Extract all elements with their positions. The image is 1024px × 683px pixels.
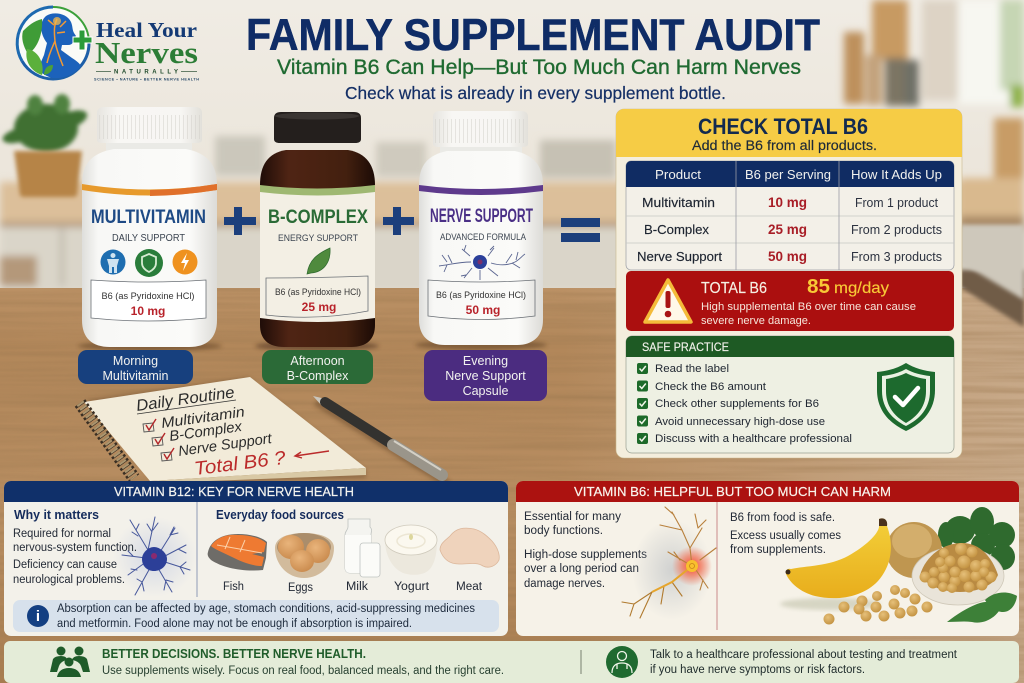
b6 table: How It Adds Up: [851, 168, 942, 182]
footer banner: Use supplements wisely. Focus on real food, balanced meals, and the right care.: [102, 665, 504, 677]
b6 table: 25 mg: [768, 222, 807, 237]
total B6 warning: 85: [807, 276, 830, 298]
time label: evening: [424, 350, 547, 401]
dose box: B6 (as Pyridoxine HCl): [275, 287, 361, 298]
checklist: Discuss with a healthcare professional: [655, 433, 852, 445]
b6 benefits and risks text: over a long period can: [524, 563, 639, 575]
panel header: [616, 109, 962, 157]
absorption note: Absorption can be affected by age, stomach conditions, acid-suppressing medicines: [57, 603, 475, 615]
why it matters: Deficiency can cause: [13, 559, 117, 571]
footer banner: [4, 641, 1019, 683]
icon: leaf: [307, 248, 330, 274]
everyday food sources: Milk: [346, 581, 368, 593]
why it matters: nervous-system function.: [13, 542, 137, 554]
notebook: daily routine: Multivitamin: [160, 404, 246, 432]
product name: MULTIVITAMIN: [91, 207, 206, 228]
time label: evening: Evening: [463, 354, 508, 368]
checklist: [637, 363, 852, 445]
label: [260, 186, 375, 322]
logo wordmark: Heal Your: [96, 18, 197, 42]
spiral binding: [80, 403, 134, 478]
illustration: damaged nerve: [622, 507, 716, 620]
panel header: VITAMIN B12: KEY FOR NERVE HEALTH: [114, 484, 354, 499]
time label: morning: [78, 350, 193, 384]
notebook: daily routine: B-Complex: [168, 419, 244, 445]
spinach: [938, 507, 1015, 570]
potato: [886, 522, 942, 578]
logo: Heal Your Nerves Naturally: Nerves: [95, 35, 198, 70]
loose chickpeas: [824, 585, 932, 624]
product name: NERVE SUPPORT: [430, 206, 533, 227]
plus sign 2: [383, 207, 414, 235]
label stripe: [82, 184, 217, 196]
food shadow: [780, 598, 880, 610]
label stripe: [419, 185, 543, 195]
food: milk: [345, 519, 380, 577]
bottle: multivitamin: DAILY SUPPORT: [112, 233, 185, 244]
panel: vitamin B6: [516, 481, 1019, 636]
food: meat: [440, 528, 499, 567]
panel header: [516, 481, 1019, 502]
food: yogurt: [385, 525, 437, 575]
time label: afternoon: Afternoon: [290, 354, 345, 368]
safe practice: SAFE PRACTICE: [642, 342, 729, 354]
everyday food sources: Everyday food sources: [216, 507, 344, 522]
time label: afternoon: B-Complex: [287, 369, 349, 383]
product name: B-COMPLEX: [268, 207, 368, 228]
tagline: Check what is already in every supplement bottle.: [345, 83, 726, 103]
time label: afternoon: [262, 350, 373, 384]
bowl of chickpeas: [912, 543, 1004, 605]
icon: info: i: [36, 608, 40, 625]
bottle: nerve support: [415, 111, 547, 350]
b6 table: 10 mg: [768, 195, 807, 210]
pen: [313, 396, 448, 484]
logo emblem: [17, 7, 92, 79]
panel header: VITAMIN B6: HELPFUL BUT TOO MUCH CAN HARM: [574, 484, 891, 499]
dose box: 25 mg: [302, 300, 336, 314]
time label: morning: Morning: [113, 354, 158, 368]
absorption note: [13, 600, 499, 632]
b6 benefits and risks text: body functions.: [524, 525, 603, 537]
dose box: B6 (as Pyridoxine HCl): [102, 291, 194, 302]
title: FAMILY SUPPLEMENT AUDIT: [246, 11, 820, 60]
dose box: B6 (as Pyridoxine HCl): [436, 290, 526, 301]
dose box: [91, 280, 206, 321]
absorption note: and metformin. Food alone may not be enough if absorption is impaired.: [57, 618, 412, 630]
total B6 warning: mg/day: [834, 280, 889, 297]
bottle: multivitamin: [78, 107, 222, 351]
panel header: Add the B6 from all products.: [692, 138, 877, 153]
b6 table: From 2 products: [851, 223, 942, 237]
time label: evening: Nerve Support: [445, 369, 526, 383]
footer banner: if you have nerve symptoms or risk factors.: [650, 664, 865, 676]
b6 table: Multivitamin: [642, 196, 715, 210]
benefit icons: [100, 249, 198, 277]
bottle: b-complex: ENERGY SUPPORT: [278, 233, 358, 244]
checklist: Check the B6 amount: [655, 381, 766, 393]
food: eggs: [275, 533, 334, 578]
handwritten list: Daily Routine: [135, 384, 236, 415]
illustration: neuron: [113, 517, 197, 597]
b6 benefits and risks text: damage nerves.: [524, 578, 605, 590]
time label: morning: Multivitamin: [102, 369, 169, 383]
b6 table: 50 mg: [768, 249, 807, 264]
time label: evening: Capsule: [463, 384, 508, 398]
everyday food sources: [208, 507, 499, 594]
b6 food text: Excess usually comes: [730, 530, 841, 542]
notebook: daily routine: [80, 377, 366, 483]
everyday food sources: Meat: [456, 581, 483, 593]
illustration: b6 foods: [780, 507, 1017, 624]
logo: Heal Your Nerves Naturally: NATURALLY: [114, 70, 178, 76]
dose box: [266, 276, 368, 317]
everyday food sources: Eggs: [288, 582, 313, 594]
footer banner: Talk to a healthcare professional about testing and treatment: [650, 649, 958, 661]
footer banner: BETTER DECISIONS. BETTER NERVE HEALTH.: [102, 646, 366, 661]
notebook: daily routine: Total B6 ?: [193, 448, 287, 480]
dose box: 50 mg: [466, 303, 500, 317]
b6 table: From 3 products: [851, 250, 942, 264]
b6 benefits and risks text: [524, 511, 647, 590]
potted plant: [1, 94, 90, 197]
equals sign: [561, 218, 600, 242]
everyday food sources: Fish: [223, 581, 244, 593]
panel header: CHECK TOTAL B6: [698, 114, 868, 139]
b6 food text: [730, 512, 841, 556]
checklist: Avoid unnecessary high-dose use: [655, 416, 825, 428]
icon: neuron: [439, 245, 525, 280]
b6 table: Product: [655, 168, 702, 182]
spinach leaf: [947, 593, 1017, 623]
bottle: nerve support: ADVANCED FORMULA: [440, 232, 527, 243]
b6 food text: from supplements.: [730, 544, 826, 556]
icon: doctor: [606, 646, 638, 678]
b6 food text: B6 from food is safe.: [730, 512, 835, 524]
dose box: [428, 280, 535, 320]
icon: warning triangle: [645, 280, 691, 322]
subtitle: Vitamin B6 Can Help—But Too Much Can Harm Nerves: [277, 56, 801, 79]
why it matters: neurological problems.: [13, 574, 125, 586]
total B6 warning: TOTAL B6: [701, 280, 767, 297]
icon: family: [50, 646, 90, 677]
notebook: daily routine: Nerve Support: [177, 431, 274, 460]
safe practice: [626, 336, 954, 453]
b6 benefits and risks text: Essential for many: [524, 511, 621, 523]
plus sign 1: [224, 207, 256, 235]
b6 table: [626, 161, 954, 270]
logo: Heal Your Nerves Naturally: [17, 7, 199, 82]
banana: [786, 518, 891, 598]
b6 table: B6 per Serving: [745, 168, 831, 182]
arrow: [295, 451, 329, 458]
b6 table: Nerve Support: [637, 250, 723, 264]
back-right corner above the angled table edge: [960, 270, 1024, 327]
everyday food sources: Yogurt: [394, 581, 430, 593]
b6 benefits and risks text: High-dose supplements: [524, 549, 647, 561]
total B6 warning: [626, 271, 954, 331]
food: fish: [208, 534, 267, 571]
icon: info: [27, 605, 49, 627]
checklist: Read the label: [655, 363, 729, 375]
checklist: Check other supplements for B6: [655, 398, 819, 410]
b6 table: B-Complex: [644, 223, 710, 237]
icon: shield check: [877, 363, 935, 431]
panel header: [4, 481, 508, 502]
why it matters: [13, 507, 197, 597]
b6 table: From 1 product: [855, 196, 939, 210]
bottle: b-complex: [255, 112, 379, 351]
total B6 warning: High supplemental B6 over time can cause: [701, 301, 916, 313]
panel: check total B6: [616, 109, 962, 458]
total B6 warning: severe nerve damage.: [701, 315, 811, 327]
logo: Heal Your Nerves Naturally: SCIENCE • NATURE • BETTER NERVE HEALTH: [94, 78, 199, 82]
dose box: 10 mg: [131, 304, 165, 318]
why it matters: Why it matters: [14, 507, 99, 522]
panel: vitamin B12: [4, 481, 508, 636]
why it matters: Required for normal: [13, 528, 111, 540]
